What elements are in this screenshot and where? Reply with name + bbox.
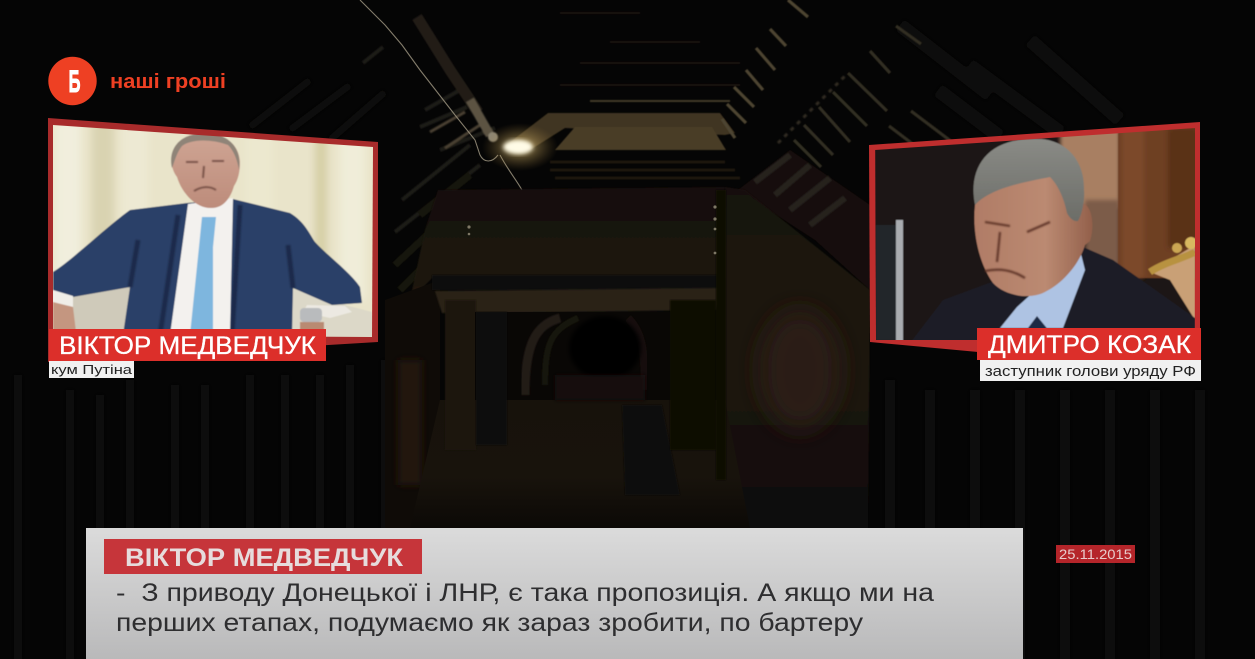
grey lamp bar <box>876 225 897 340</box>
speaker heading <box>104 539 422 574</box>
quote text: перших етапах, подумаємо як зараз зробити, по бартеру <box>116 609 864 637</box>
ceiling horizontal ribs <box>505 13 740 178</box>
face <box>974 170 1092 296</box>
tie <box>1028 316 1047 328</box>
logo wordmark: наші гроші <box>110 70 226 93</box>
outer vertical wall strips <box>18 360 1200 659</box>
wood background <box>1060 128 1120 208</box>
speaker heading: ВІКТОР МЕДВЕДЧУК <box>125 544 404 572</box>
beam and lintel <box>432 275 724 290</box>
gold chair <box>1154 247 1195 319</box>
panel: Viktor Medvedchuk portrait: кум Путіна <box>51 362 133 377</box>
wall studs <box>467 205 717 254</box>
bulb glow <box>482 123 558 171</box>
quote text: - З приводу Донецької і ЛНР, є така пропозиція. А якщо ми на <box>116 579 934 607</box>
hair <box>973 139 1084 221</box>
tie <box>190 217 216 335</box>
head <box>172 134 240 208</box>
face features <box>186 161 224 191</box>
red tilted frame <box>869 122 1200 352</box>
name label <box>49 329 326 361</box>
left wall reddish stain <box>398 360 422 485</box>
role label <box>980 360 1201 381</box>
photo <box>50 120 376 342</box>
quote text <box>116 579 934 637</box>
panel: Viktor Medvedchuk portrait <box>48 118 378 378</box>
right wall <box>725 187 870 528</box>
floor <box>410 400 750 528</box>
panel: transcript quote <box>86 528 1023 659</box>
name label <box>977 328 1201 360</box>
rear wall <box>410 187 725 300</box>
wrist and watch <box>300 322 324 329</box>
panel: Dmytro Kozak portrait <box>869 122 1201 381</box>
left diagonal structure with ribs <box>363 17 498 290</box>
face features <box>985 222 1050 278</box>
panel: Viktor Medvedchuk portrait: ВІКТОР МЕДВЕДЧУК <box>59 332 316 360</box>
logo <box>48 57 226 105</box>
left wall <box>385 280 440 528</box>
suit <box>53 199 362 335</box>
collar <box>1000 250 1085 328</box>
suit <box>910 247 1195 343</box>
panel: Dmytro Kozak portrait: заступник голови уряду РФ <box>985 364 1196 380</box>
shirt <box>170 198 233 335</box>
role label <box>49 361 134 378</box>
right wall stain <box>760 310 840 430</box>
portal jambs <box>445 300 476 450</box>
photo <box>875 128 1198 343</box>
suit shading <box>130 205 293 335</box>
cables <box>360 0 522 190</box>
right diagonal ribs <box>722 0 952 167</box>
chair <box>72 286 130 329</box>
icon: red circle logo: Б <box>69 64 80 100</box>
date label: 25.11.2015 <box>1059 546 1132 562</box>
far dim ribs around the frames <box>250 25 1120 140</box>
red tilted frame <box>48 118 378 362</box>
panel: Dmytro Kozak portrait: ДМИТРО КОЗАК <box>988 331 1191 359</box>
grey panel background <box>86 528 1023 659</box>
pipe <box>417 17 478 112</box>
cuffs and hands <box>53 290 73 307</box>
icon: red circle logo <box>48 57 97 105</box>
portal opening <box>475 312 670 400</box>
hair <box>171 134 240 170</box>
